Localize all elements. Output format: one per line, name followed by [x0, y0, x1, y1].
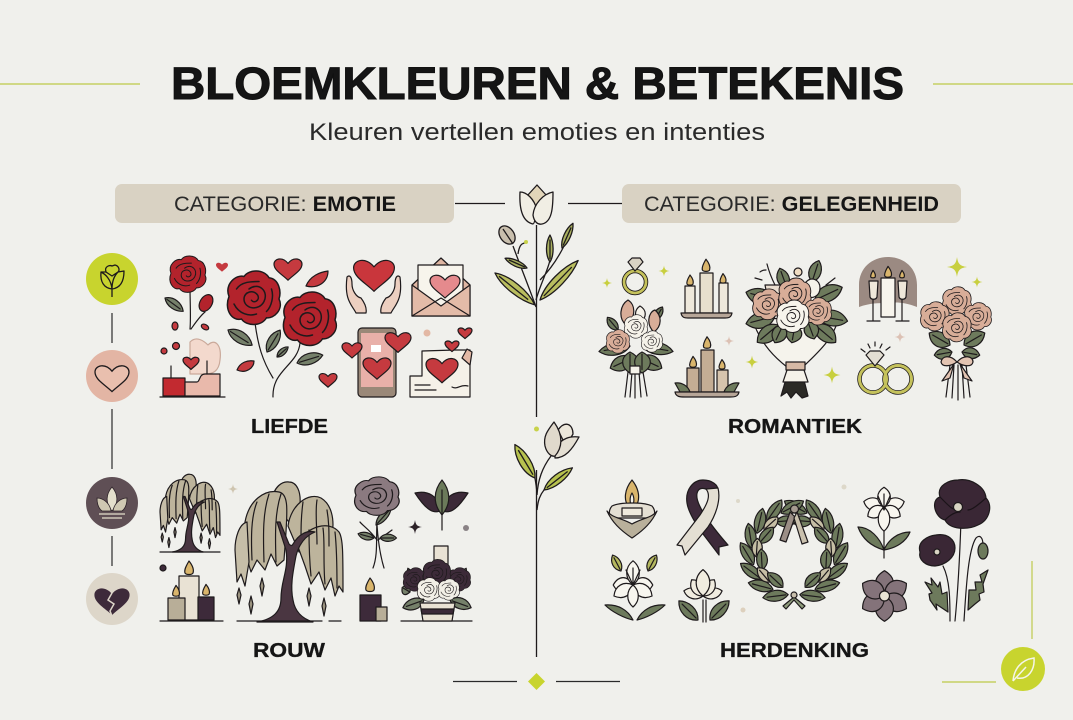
panel: herdenking [605, 480, 990, 662]
icon: broken heart badge [86, 573, 138, 625]
timeline connectors [111, 313, 113, 566]
top tulip [520, 185, 553, 224]
icon: candle tray [681, 259, 732, 318]
icon: low candle set [675, 337, 739, 397]
icon: two big roses [225, 259, 337, 397]
panel: rouw [160, 474, 473, 662]
lower tulip [545, 422, 579, 458]
icon: love letter [412, 258, 470, 316]
icon: candle arch with glasses [859, 257, 917, 321]
category header: emotie [115, 184, 454, 223]
icon: big willow [228, 482, 343, 622]
icon: heart badge [86, 350, 138, 402]
icon: lily [858, 487, 910, 558]
icon: small rose with bud [163, 256, 228, 331]
icon: dark candle [360, 578, 387, 621]
icon: awareness ribbon [677, 480, 728, 555]
icon: mauve rose [355, 477, 399, 568]
icon: white lily with leaves [605, 553, 665, 620]
central divider with tulips [455, 185, 622, 657]
bud [496, 223, 518, 247]
label: ROUW [253, 640, 325, 662]
title rules [0, 83, 1073, 85]
category header: gelegenheid: CATEGORIE: GELEGENHEID [644, 193, 939, 216]
icon: mauve flower [858, 571, 911, 621]
icon: card with hearts [410, 328, 472, 397]
icon: small bouquet [598, 300, 674, 398]
icon: phone with hearts [342, 328, 411, 397]
icon: memorial wreath [736, 497, 852, 609]
icon: three candles [160, 561, 223, 621]
icon: large bouquet [744, 259, 849, 398]
decorative sparkles [602, 257, 982, 384]
panel: liefde [160, 256, 472, 438]
label: ROMANTIEK [728, 416, 863, 438]
bottom divider with diamond [453, 673, 620, 690]
subtitle: Kleuren vertellen emoties en intenties [309, 119, 765, 146]
icon: small willow [160, 474, 220, 552]
label: LIEFDE [251, 416, 328, 438]
corner ornament with leaf badge [942, 561, 1045, 691]
category header: emotie: CATEGORIE: EMOTIE [174, 193, 396, 216]
panel: romantiek [598, 257, 991, 438]
icon: lotus candle [607, 480, 657, 538]
icon: small lotus flower [674, 570, 733, 625]
icon: poppies [919, 480, 990, 621]
category header: gelegenheid [622, 184, 961, 223]
icon: candles with heart [160, 339, 225, 397]
icon: rose bouquet [921, 287, 991, 400]
title: BLOEMKLEUREN & BETEKENIS [171, 58, 904, 109]
icon: tulip badge [86, 253, 138, 305]
icon: flower arrangement [400, 546, 473, 621]
decorative sparkles [736, 484, 846, 612]
icon: dark lotus [408, 480, 469, 534]
icon: heart in hands [346, 260, 401, 313]
icon: lotus badge [86, 477, 138, 529]
icon: wedding rings [860, 342, 912, 392]
label: HERDENKING [720, 640, 869, 662]
icon: gold ring [624, 258, 646, 293]
